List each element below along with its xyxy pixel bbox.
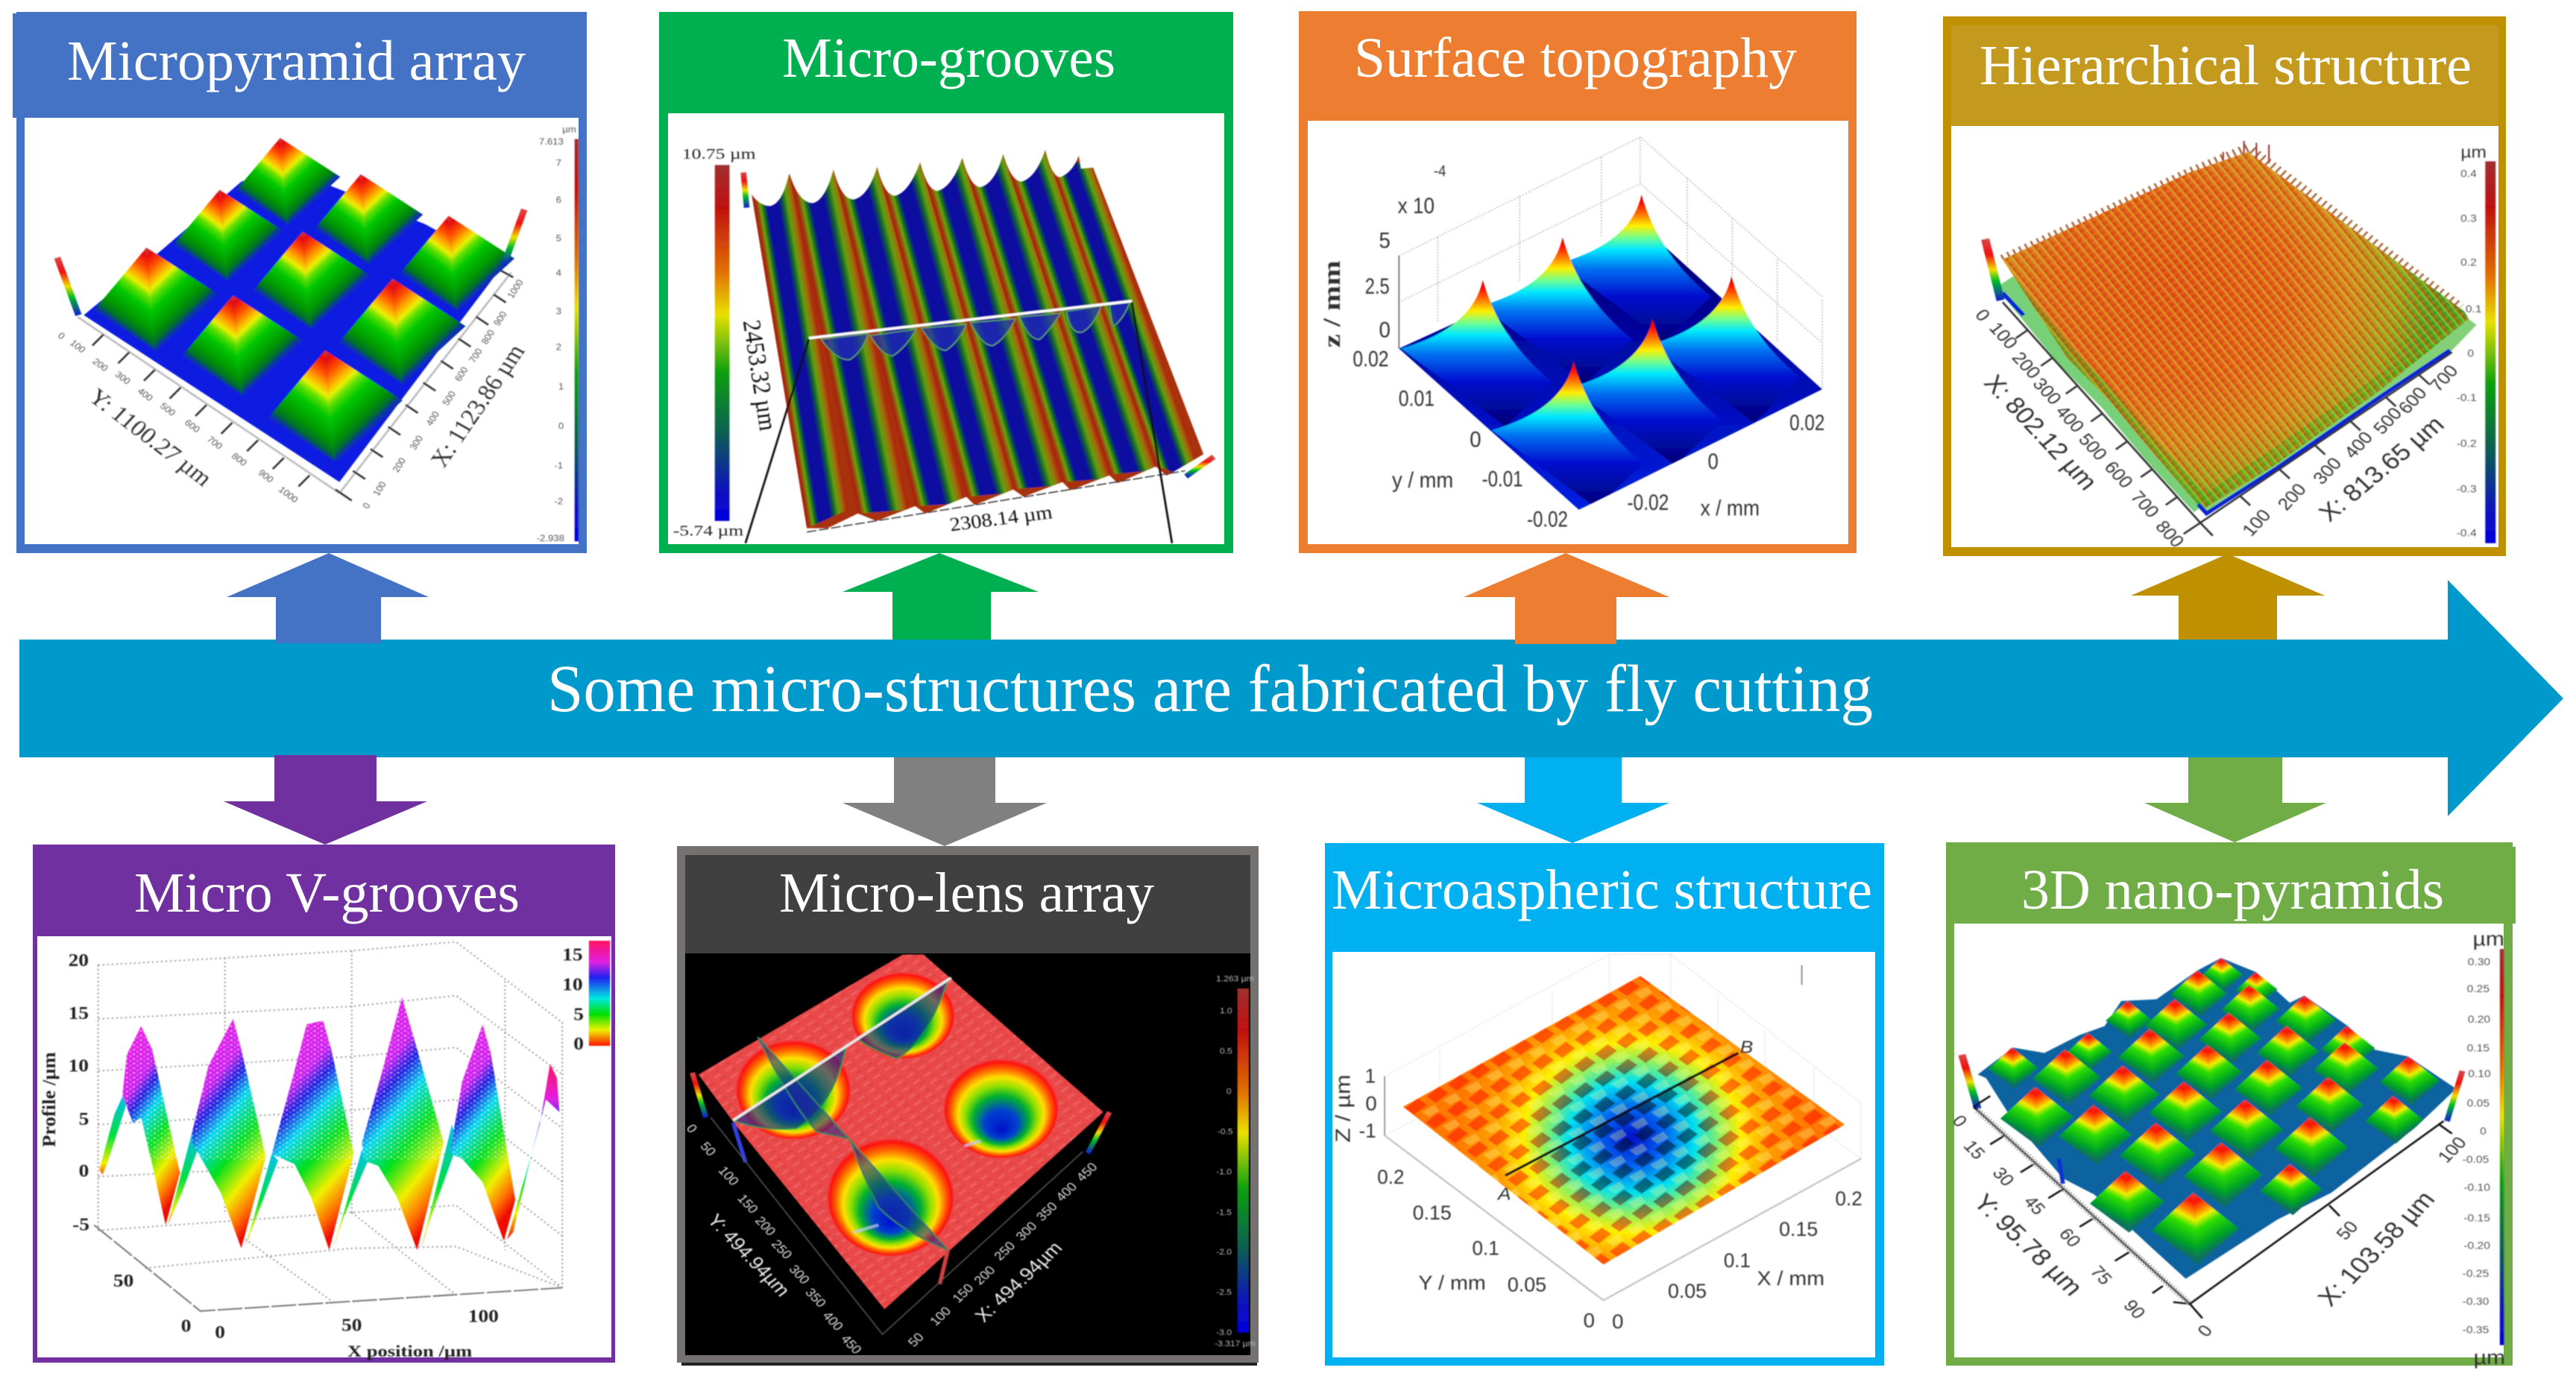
chart: micropyramid surface: 100 bbox=[68, 338, 87, 355]
heading: micro-lens array bbox=[685, 855, 1250, 953]
chart: micro-groove surface: 10.75 µm bbox=[682, 145, 756, 163]
chart: surface topography cusps: 5 bbox=[1379, 228, 1391, 253]
chart: micropyramid surface: 300 bbox=[408, 434, 425, 452]
chart: micro-lens surface: 50 bbox=[697, 1139, 719, 1158]
chart: micro-lens surface: 150 bbox=[734, 1191, 761, 1216]
chart: microaspheric surface: B bbox=[1740, 1038, 1753, 1057]
chart: micro-lens surface: 100 bbox=[715, 1164, 743, 1188]
chart: micro-lens surface: 300 bbox=[786, 1262, 813, 1287]
chart: nano-pyramid surface: -0.25 bbox=[2463, 1269, 2489, 1280]
chart: micropyramid surface: 600 bbox=[183, 417, 202, 435]
chart: surface topography cusps: -4 bbox=[1434, 162, 1446, 180]
chart: surface topography cusps: -0.01 bbox=[1482, 467, 1523, 491]
chart: hierarchical structure surface: 0.2 bbox=[2460, 257, 2477, 268]
chart: nano-pyramid surface: µm bbox=[2474, 1347, 2505, 1369]
chart: surface topography cusps: -0.02 bbox=[1627, 490, 1669, 515]
chart: microaspheric surface: A bbox=[1496, 1185, 1511, 1204]
chart: microaspheric surface: 0.2 bbox=[1836, 1188, 1862, 1210]
chart: hierarchical structure surface: 400 bbox=[2051, 403, 2088, 436]
chart: V-groove profile: 15 bbox=[69, 1003, 89, 1023]
chart: microaspheric surface: Z / µm bbox=[1332, 1074, 1355, 1143]
chart: microaspheric surface: 0.2 bbox=[1377, 1167, 1404, 1189]
chart: micro-lens surface: 0 bbox=[1226, 1088, 1232, 1096]
chart: surface topography cusps: x / mm bbox=[1701, 496, 1760, 520]
chart: microaspheric surface: Y / mm bbox=[1418, 1272, 1486, 1295]
chart: nano-pyramid surface: 90 bbox=[2119, 1296, 2150, 1322]
chart: micro-lens surface: 350 bbox=[802, 1285, 829, 1310]
chart: micropyramid surface: 0 bbox=[558, 421, 564, 431]
chart: micro-lens surface: 450 bbox=[1073, 1160, 1100, 1184]
chart: micropyramid surface: 6 bbox=[556, 195, 561, 205]
chart: micro-lens surface: Y: 494.94µm bbox=[703, 1211, 794, 1301]
heading: micropyramid array: Micropyramid array bbox=[67, 30, 526, 92]
heading: surface topography: Surface topography bbox=[1354, 27, 1797, 89]
heading: 3D nano-pyramids: 3D nano-pyramids bbox=[2021, 859, 2444, 921]
chart: micro-lens surface: -2.0 bbox=[1216, 1248, 1232, 1257]
panel: micro-grooves bbox=[659, 12, 1233, 553]
chart: micropyramid surface: 1000 bbox=[506, 278, 526, 300]
chart: micro-lens surface: 200 bbox=[971, 1263, 998, 1287]
chart: microaspheric surface: X / mm bbox=[1757, 1268, 1824, 1290]
chart: micropyramid surface: 4 bbox=[556, 268, 561, 278]
chart: micropyramid surface: 900 bbox=[491, 309, 509, 327]
chart: micropyramid surface: 700 bbox=[467, 347, 485, 365]
chart: hierarchical structure surface: 300 bbox=[2309, 454, 2346, 488]
chart: hierarchical structure surface: 800 bbox=[2151, 517, 2188, 551]
chart: nano-pyramid surface: 50 bbox=[2332, 1218, 2363, 1243]
chart: micropyramid surface: -1 bbox=[554, 461, 563, 471]
chart: micropyramid surface: 300 bbox=[113, 369, 133, 386]
chart: V-groove profile: 50 bbox=[113, 1271, 133, 1291]
chart: micro-lens surface bbox=[683, 953, 1256, 1357]
arrow: to hierarchical structure bbox=[2131, 554, 2325, 640]
chart: micropyramid surface: 600 bbox=[453, 365, 470, 383]
chart: micropyramid surface: Y: 1100.27 µm bbox=[84, 384, 217, 491]
arrow: to micro-grooves bbox=[843, 553, 1039, 640]
chart: microaspheric surface: 0.1 bbox=[1473, 1237, 1499, 1260]
chart: hierarchical structure surface: 300 bbox=[2028, 374, 2065, 408]
chart: nano-pyramid surface: 0 bbox=[2480, 1126, 2487, 1138]
chart: nano-pyramid surface: 0.05 bbox=[2467, 1099, 2490, 1109]
chart: micro-lens surface: 400 bbox=[1053, 1179, 1080, 1204]
chart: hierarchical structure surface: 0 bbox=[1971, 306, 1994, 325]
chart: micro-lens surface: 300 bbox=[1013, 1219, 1040, 1243]
heading: micro-grooves: Micro-grooves bbox=[782, 27, 1115, 89]
chart: hierarchical structure surface: 400 bbox=[2340, 429, 2377, 462]
chart: V-groove profile: 100 bbox=[468, 1306, 499, 1326]
panel: microaspheric structure bbox=[1325, 843, 1884, 1366]
chart: nano-pyramid surface: -0.05 bbox=[2463, 1155, 2489, 1166]
chart: V-groove profile: Profile /µm bbox=[40, 1052, 60, 1147]
chart: surface topography cusps bbox=[1317, 137, 1824, 531]
chart: nano-pyramid surface: 0.15 bbox=[2467, 1044, 2490, 1054]
chart: micro-lens surface: 250 bbox=[991, 1239, 1018, 1263]
chart: surface topography cusps: z / mm bbox=[1317, 260, 1345, 347]
chart: nano-pyramid surface: 0 bbox=[1947, 1112, 1971, 1131]
chart: micro-lens surface: 400 bbox=[819, 1309, 847, 1334]
chart: microaspheric surface: 0.15 bbox=[1413, 1202, 1452, 1225]
central arrow: fly cutting: Some micro-structures are fabricated by fly cutting bbox=[547, 652, 1873, 726]
chart: nano-pyramid surface: -0.15 bbox=[2463, 1214, 2490, 1224]
chart: micropyramid surface: 400 bbox=[136, 386, 155, 403]
chart: hierarchical structure surface: 100 bbox=[1985, 319, 2021, 353]
chart: hierarchical structure surface: 0.4 bbox=[2460, 168, 2477, 180]
chart: micropyramid surface: 200 bbox=[90, 356, 110, 373]
chart: micropyramid surface: 2 bbox=[556, 342, 561, 352]
chart: micro-lens surface: -2.5 bbox=[1216, 1289, 1232, 1297]
chart: surface topography cusps: 0.01 bbox=[1399, 386, 1435, 411]
chart: micro-lens surface: -1.5 bbox=[1216, 1209, 1232, 1217]
chart: nano-pyramid surface: Y: 95.78 µm bbox=[1968, 1189, 2088, 1301]
chart: microaspheric surface: 0 bbox=[1365, 1093, 1377, 1115]
chart: micro-groove surface: 2453.32 µm bbox=[737, 318, 782, 432]
chart: hierarchical structure surface: X: 802.12 µm bbox=[1978, 370, 2103, 496]
chart: micro-lens surface: X: 494.94µm bbox=[971, 1238, 1067, 1326]
chart: hierarchical structure surface: 0.1 bbox=[2466, 304, 2482, 315]
chart: hierarchical structure surface: 700 bbox=[2126, 488, 2163, 522]
panel: micropyramid array bbox=[13, 12, 587, 553]
chart: V-groove profile: 5 bbox=[79, 1108, 89, 1129]
chart: micropyramid surface: 200 bbox=[391, 456, 408, 474]
heading: hierarchical structure bbox=[1951, 25, 2498, 126]
chart: micro-lens surface: -1.0 bbox=[1216, 1168, 1232, 1176]
chart: nano-pyramid surface: 75 bbox=[2085, 1263, 2116, 1289]
chart: nano-pyramid surface: -0.35 bbox=[2463, 1325, 2489, 1336]
chart: nano-pyramid surface: 0.10 bbox=[2468, 1069, 2491, 1079]
chart: V-groove profile bbox=[40, 941, 610, 1361]
chart: surface topography cusps: -0.02 bbox=[1527, 507, 1568, 531]
chart: microaspheric surface: 0.05 bbox=[1508, 1274, 1546, 1296]
chart: micro-lens surface: 0.5 bbox=[1220, 1047, 1232, 1056]
chart: micro-lens surface: 250 bbox=[768, 1237, 796, 1261]
arrow: to micro V-grooves bbox=[224, 755, 427, 845]
chart: micro-lens surface: 1.263 µm bbox=[1216, 975, 1254, 983]
chart: micro-groove surface: -5.74 µm bbox=[673, 523, 743, 539]
chart: hierarchical structure surface: 100 bbox=[2238, 506, 2276, 540]
chart: micropyramid surface: 3 bbox=[556, 306, 561, 316]
chart: micropyramid surface: -2.938 bbox=[537, 534, 564, 543]
chart: nano-pyramid surface: 45 bbox=[2019, 1193, 2050, 1219]
chart: micropyramid surface: 800 bbox=[479, 328, 497, 346]
heading: micropyramid array bbox=[13, 13, 587, 118]
chart: micro-lens surface: 1.0 bbox=[1220, 1007, 1232, 1015]
chart: micropyramid surface: 800 bbox=[230, 451, 249, 468]
chart: micro-lens surface: 150 bbox=[949, 1281, 977, 1305]
chart: surface topography cusps: 0.02 bbox=[1352, 347, 1389, 371]
chart: hierarchical structure surface: µm bbox=[2460, 143, 2487, 161]
chart: nano-pyramid surface: 15 bbox=[1959, 1137, 1989, 1163]
chart: surface topography cusps: 0.02 bbox=[1789, 410, 1824, 435]
chart: nano-pyramid surface: µm bbox=[2473, 928, 2504, 950]
chart: surface topography cusps: x 10 bbox=[1398, 193, 1435, 218]
chart: hierarchical structure surface: 0.3 bbox=[2460, 213, 2477, 224]
chart: micropyramid surface: 0 bbox=[360, 501, 373, 511]
chart: nano-pyramid surface: -0.30 bbox=[2463, 1297, 2489, 1307]
chart: nano-pyramid surface: 100 bbox=[2434, 1134, 2471, 1167]
heading: micro V-grooves: Micro V-grooves bbox=[134, 862, 520, 924]
chart: nano-pyramid surface bbox=[1947, 928, 2505, 1369]
chart: hierarchical structure surface: 0 bbox=[2467, 348, 2474, 359]
chart: hierarchical structure surface: 600 bbox=[2100, 458, 2137, 492]
heading: microaspheric structure: Microaspheric structure bbox=[1332, 859, 1872, 921]
chart: micropyramid surface: 0 bbox=[56, 330, 67, 341]
panel: micro-lens array bbox=[677, 846, 1259, 1366]
arrow: to microaspheric structure bbox=[1477, 757, 1669, 843]
chart: V-groove profile: 10 bbox=[69, 1056, 89, 1076]
chart: micro-lens surface: 200 bbox=[752, 1214, 779, 1238]
chart: micropyramid surface: 5 bbox=[556, 233, 561, 243]
chart: hierarchical structure surface: 600 bbox=[2395, 384, 2431, 417]
panel: 3D nano-pyramids bbox=[1946, 842, 2516, 1369]
chart: microaspheric surface: 0.1 bbox=[1724, 1250, 1751, 1272]
chart: micropyramid surface: 400 bbox=[424, 410, 441, 428]
chart: nano-pyramid surface: -0.20 bbox=[2463, 1241, 2490, 1252]
chart: micro-lens surface: 350 bbox=[1033, 1199, 1060, 1224]
chart: hierarchical structure surface: 500 bbox=[2074, 430, 2111, 464]
chart: micro-lens surface: 450 bbox=[838, 1332, 865, 1357]
chart: hierarchical structure surface bbox=[1971, 141, 2495, 551]
chart: hierarchical structure surface: 700 bbox=[2425, 362, 2463, 396]
chart: micropyramid surface: -2 bbox=[554, 496, 563, 506]
chart: V-groove profile: X position /µm bbox=[347, 1342, 473, 1361]
chart: hierarchical structure surface: 500 bbox=[2369, 404, 2406, 438]
chart: micropyramid surface bbox=[56, 124, 579, 543]
chart: nano-pyramid surface: 30 bbox=[1988, 1164, 2018, 1190]
chart: micropyramid surface: 1 bbox=[558, 382, 564, 391]
chart: surface topography cusps: 0 bbox=[1470, 427, 1481, 452]
chart: microaspheric surface bbox=[1332, 954, 1862, 1333]
chart: microaspheric surface: 0.15 bbox=[1779, 1219, 1818, 1240]
arrow: to micro-lens array bbox=[843, 757, 1047, 846]
chart: hierarchical structure surface: -0.2 bbox=[2457, 438, 2477, 449]
chart: hierarchical structure surface: -0.1 bbox=[2457, 393, 2477, 404]
chart: micropyramid surface: 7.613 bbox=[539, 137, 564, 147]
arrow: to surface topography bbox=[1464, 553, 1669, 644]
chart: V-groove profile: 0 bbox=[181, 1316, 191, 1336]
chart: micro-lens surface: -0.5 bbox=[1218, 1128, 1233, 1137]
chart: micropyramid surface: 700 bbox=[205, 434, 224, 451]
panel: surface topography bbox=[1299, 11, 1857, 553]
chart: nano-pyramid surface: 0 bbox=[2194, 1322, 2217, 1340]
chart: V-groove profile: 0 bbox=[573, 1033, 584, 1053]
chart: micro-lens surface: -3.317 µm bbox=[1215, 1340, 1256, 1348]
chart: nano-pyramid surface: 0.20 bbox=[2468, 1015, 2490, 1026]
chart: nano-pyramid surface: -0.10 bbox=[2463, 1183, 2490, 1193]
chart: micropyramid surface: 500 bbox=[158, 401, 177, 418]
chart: hierarchical structure surface: -0.3 bbox=[2457, 484, 2477, 495]
heading: hierarchical structure: Hierarchical structure bbox=[1980, 34, 2472, 97]
chart: nano-pyramid surface: 0.30 bbox=[2468, 957, 2490, 968]
chart: microaspheric surface: 0.05 bbox=[1668, 1281, 1707, 1303]
chart: micropyramid surface: µm bbox=[562, 124, 576, 134]
chart: microaspheric surface: -1 bbox=[1359, 1120, 1376, 1143]
chart: hierarchical structure surface: X: 813.65 µm bbox=[2314, 411, 2450, 527]
chart: nano-pyramid surface: 60 bbox=[2055, 1225, 2085, 1251]
chart: micro-lens surface: 50 bbox=[904, 1330, 927, 1349]
chart: V-groove profile: 0 bbox=[79, 1161, 89, 1181]
chart: V-groove profile: 5 bbox=[573, 1004, 584, 1024]
chart: surface topography cusps: 0 bbox=[1379, 318, 1391, 342]
central arrow: fly cutting bbox=[19, 580, 2563, 816]
chart: V-groove profile: 50 bbox=[341, 1315, 362, 1335]
chart: micropyramid surface: 100 bbox=[371, 480, 388, 498]
chart: micro-groove surface bbox=[673, 141, 1214, 543]
heading: micro-lens array: Micro-lens array bbox=[779, 862, 1154, 924]
chart: nano-pyramid surface: X: 103.58 µm bbox=[2312, 1187, 2441, 1311]
chart: nano-pyramid surface: 0.25 bbox=[2467, 984, 2490, 995]
heading: 3D nano-pyramids bbox=[1946, 847, 2516, 924]
chart: hierarchical structure surface: -0.4 bbox=[2457, 528, 2477, 540]
chart: V-groove profile: 10 bbox=[562, 974, 583, 994]
chart: micro-lens surface: -3.0 bbox=[1216, 1329, 1232, 1337]
chart: surface topography cusps: 0 bbox=[1707, 449, 1719, 474]
chart: surface topography cusps: 2.5 bbox=[1365, 274, 1390, 299]
chart: V-groove profile: 20 bbox=[69, 950, 89, 971]
chart: micropyramid surface: 900 bbox=[256, 467, 276, 485]
chart: micropyramid surface: 1000 bbox=[277, 485, 300, 505]
chart: micro-lens surface: 0 bbox=[683, 1121, 701, 1135]
chart: V-groove profile: 15 bbox=[562, 944, 583, 965]
chart: micropyramid surface: X: 1123.86 µm bbox=[425, 340, 531, 472]
chart: hierarchical structure surface: 200 bbox=[2008, 349, 2044, 382]
chart: micropyramid surface: 7 bbox=[556, 158, 561, 168]
chart: V-groove profile: 0 bbox=[215, 1322, 225, 1342]
chart: micro-lens surface: 100 bbox=[927, 1304, 954, 1328]
chart: micropyramid surface: 500 bbox=[441, 389, 458, 407]
chart: V-groove profile: -5 bbox=[72, 1214, 89, 1234]
panel: micro V-grooves bbox=[33, 845, 615, 1363]
chart: micro-groove surface: 2308.14 µm bbox=[948, 502, 1054, 535]
chart: microaspheric surface: 0 bbox=[1584, 1310, 1595, 1332]
arrow: to 3D nano-pyramids bbox=[2144, 757, 2326, 842]
arrow: to micropyramid array bbox=[227, 553, 429, 643]
chart: surface topography cusps: y / mm bbox=[1392, 467, 1453, 493]
chart: microaspheric surface: 1 bbox=[1365, 1065, 1376, 1088]
panel: hierarchical structure bbox=[1943, 16, 2506, 556]
chart: microaspheric surface: 0 bbox=[1612, 1311, 1623, 1333]
chart: hierarchical structure surface: 200 bbox=[2274, 480, 2311, 514]
